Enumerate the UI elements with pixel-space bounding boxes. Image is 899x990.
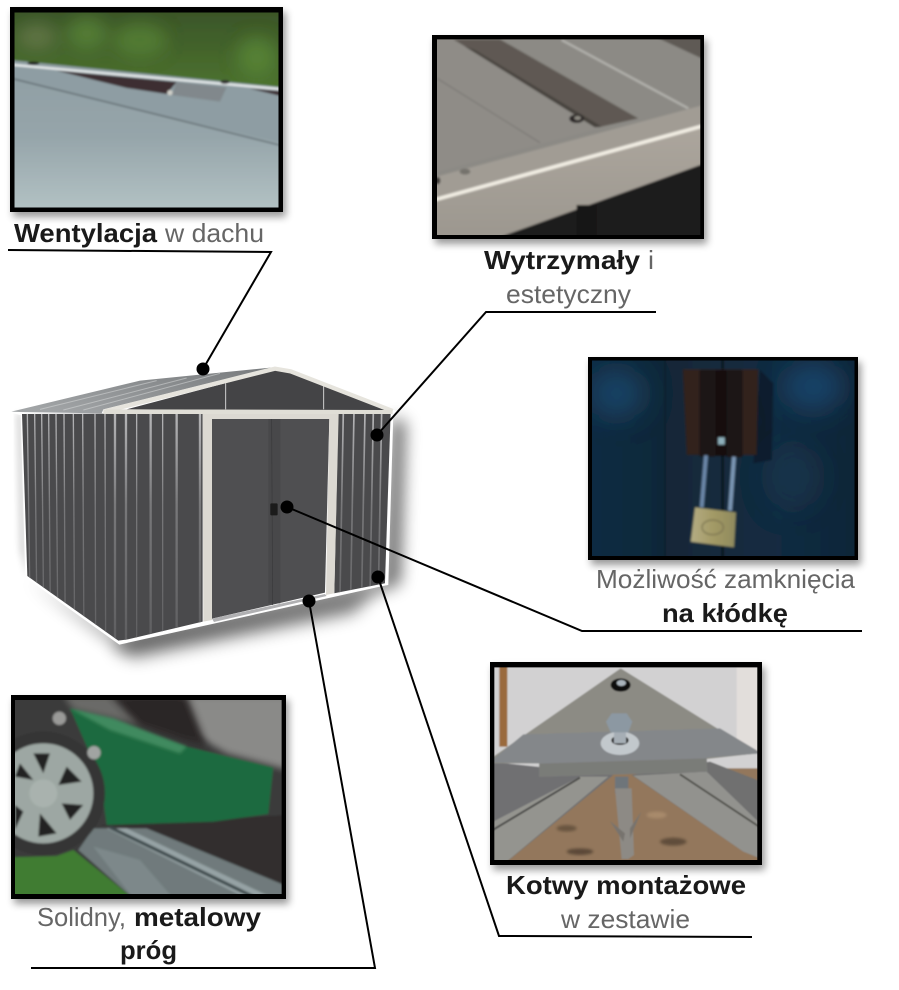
caption: padlock: na kłódkę [662,598,788,628]
leader line: durable [370,312,656,442]
caption: threshold: Solidny, [37,902,126,932]
anchor [614,776,629,789]
grommet [611,678,631,692]
door frame [203,414,339,622]
handle [270,503,278,515]
bolt [601,732,639,755]
threshold [212,594,327,622]
photo panel: roof ventilation [10,7,286,217]
leader line: ventilation [8,250,271,376]
caption: anchors [506,870,746,934]
photo panel: anchors [490,662,765,870]
caption: durable: estetyczny [506,279,631,309]
white cut-out outline [9,365,397,645]
leader line: threshold [31,594,375,968]
floor [122,816,282,882]
mower body [70,708,273,825]
caption: padlock [596,564,856,628]
photo panel: threshold [0,695,289,904]
caption: threshold: metalowy [134,902,262,932]
roof trim [106,369,393,411]
wheel [88,759,106,834]
caption: ventilation: Wentylacja [14,218,158,248]
caption: anchors: w zestawie [560,904,690,934]
caption: ventilation [14,218,264,248]
wall ribs [27,413,200,650]
ground [508,768,758,860]
caption: ventilation: w dachu [164,218,264,248]
doors [212,418,329,619]
side and front-left wall [22,413,203,641]
rails [494,762,613,852]
photo panel: durable edge [432,33,707,244]
caption: durable: i [648,245,654,275]
caption: anchors: Kotwy montażowe [506,870,746,900]
leader line: anchors [372,570,752,937]
right wall [334,413,391,593]
caption: threshold: próg [120,935,177,965]
shed illustration [9,365,405,658]
leader line: padlock [280,500,862,631]
caption: threshold [37,902,262,965]
caption: durable [484,245,654,309]
grass [15,849,130,894]
plate [494,668,742,764]
gable [127,370,388,411]
roof [11,367,273,413]
photo panel: padlock [587,355,861,565]
caption: durable: Wytrzymały [484,245,641,275]
caption: padlock: Możliwość zamknięcia [596,564,856,594]
threshold [78,828,288,898]
